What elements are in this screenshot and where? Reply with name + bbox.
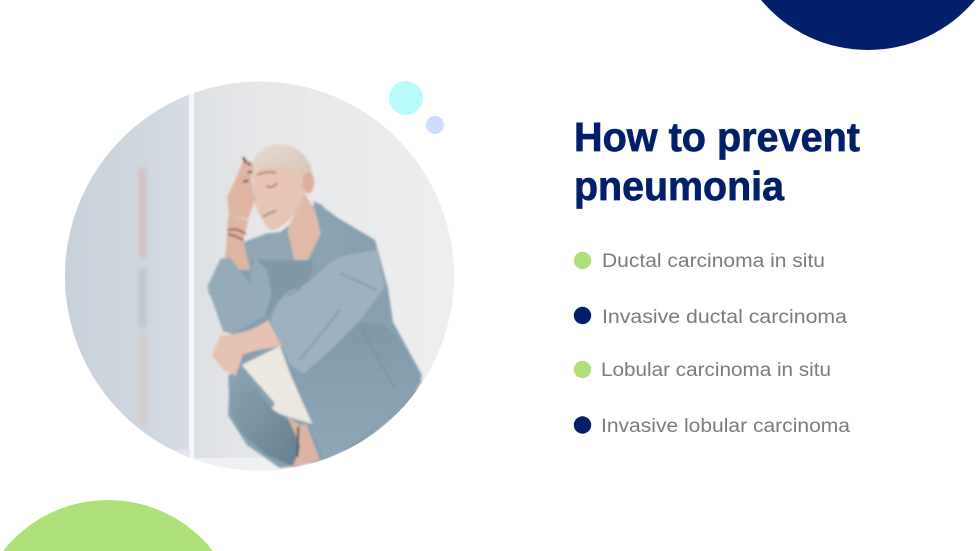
title: pneumonia — [574, 163, 785, 209]
raised forearm — [224, 217, 250, 270]
list item 1: Ductal carcinoma in situ — [602, 251, 825, 272]
periwinkle decorative dot — [426, 116, 444, 134]
title — [574, 114, 860, 209]
robe skirt — [325, 379, 422, 459]
robe hem edge — [294, 427, 301, 457]
bare lower leg — [287, 417, 320, 468]
circular photo: woman resting her head against a wall — [65, 81, 460, 475]
cyan decorative dot — [389, 81, 423, 115]
robe over lower leg — [228, 370, 297, 467]
decorative navy circle top right — [761, 0, 975, 50]
big front sleeve — [271, 250, 385, 374]
forearm and hand — [212, 320, 282, 376]
title: How to prevent — [574, 114, 860, 160]
ear — [303, 172, 314, 193]
fingernails — [243, 157, 252, 182]
bracelet — [228, 229, 246, 240]
belt and fold shadows — [286, 272, 376, 360]
decorative green circle bottom left — [3, 500, 213, 551]
hand on forehead — [227, 158, 254, 218]
left sleeve — [207, 258, 272, 334]
head — [252, 166, 313, 231]
robe shoulders — [243, 231, 292, 267]
list item 4: Invasive lobular carcinoma — [601, 416, 850, 437]
face features — [248, 172, 277, 217]
pants — [242, 346, 312, 424]
list item 2: Invasive ductal carcinoma — [602, 307, 847, 328]
dark centre of robe — [251, 258, 312, 272]
shaved scalp — [252, 146, 310, 175]
list item 3: Lobular carcinoma in situ — [601, 360, 831, 381]
lower body — [207, 250, 422, 468]
list — [574, 251, 850, 437]
upper body — [224, 144, 324, 272]
neck and chest — [287, 193, 321, 270]
full robe silhouette — [208, 203, 422, 468]
